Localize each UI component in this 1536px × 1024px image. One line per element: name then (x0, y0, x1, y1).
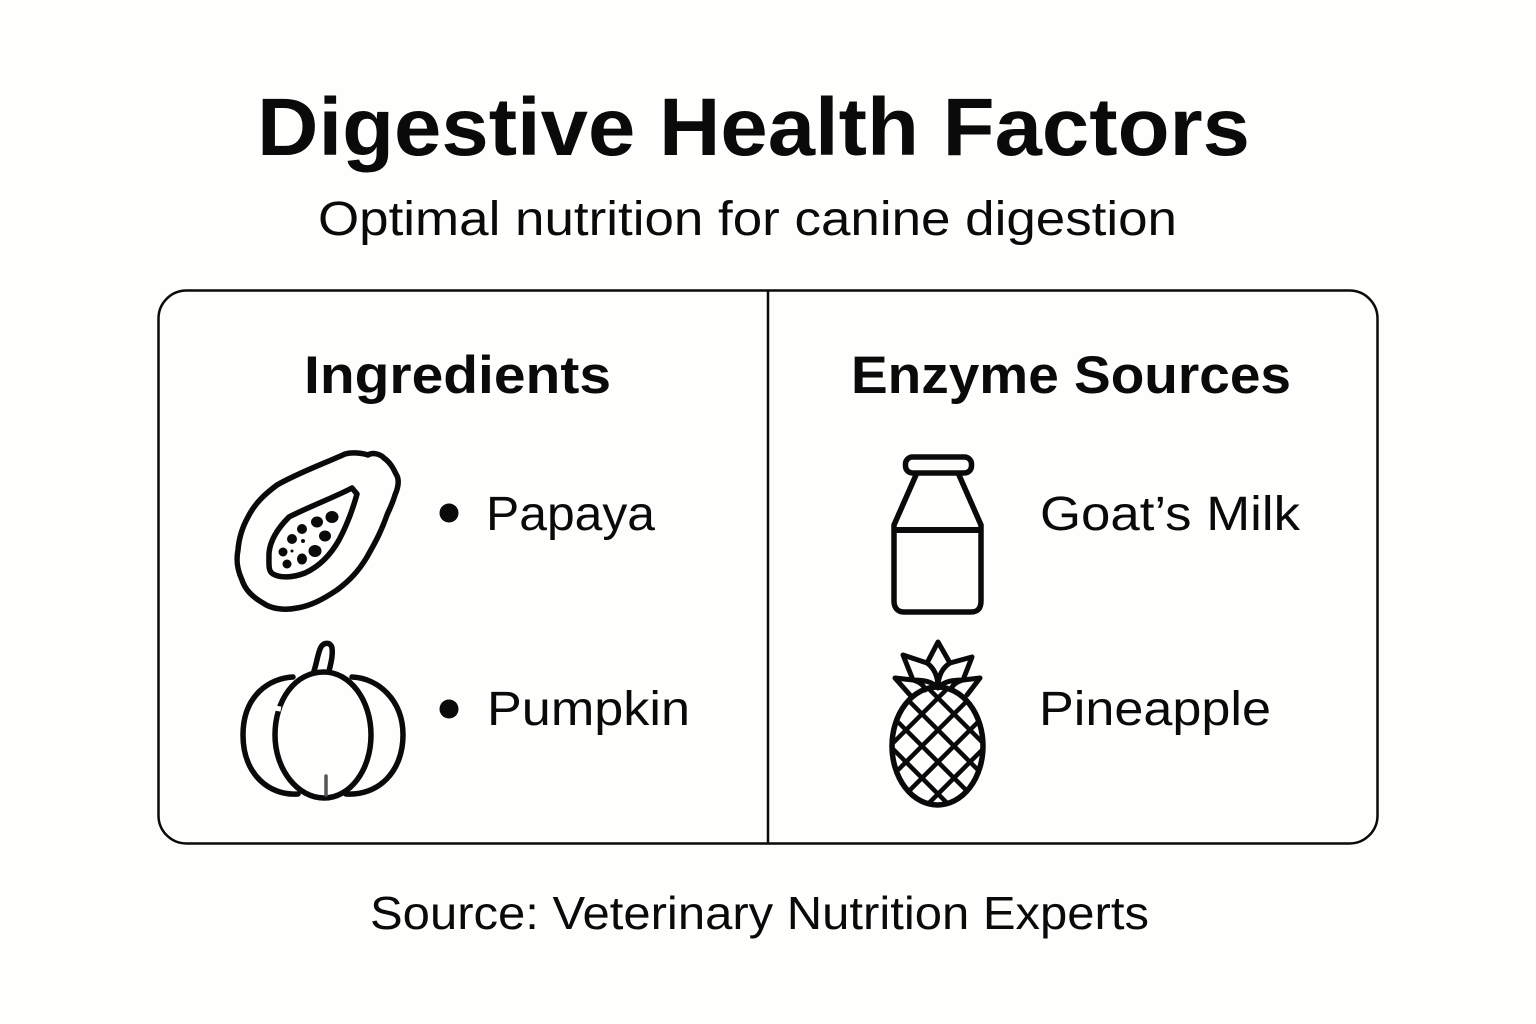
icon: pumpkin (243, 643, 403, 798)
label: papaya: Papaya (486, 488, 655, 541)
heading: enzyme sources: Enzyme Sources (851, 346, 1291, 405)
panel: comparison table (158, 290, 1378, 888)
icon: milk bottle (894, 457, 981, 612)
bullet: pumpkin (440, 700, 458, 718)
icon: pineapple (889, 640, 986, 808)
icon: papaya (237, 453, 398, 609)
source note: Source: Veterinary Nutrition Experts (370, 887, 1149, 939)
title: Digestive Health Factors (257, 82, 1250, 173)
label: pineapple: Pineapple (1039, 683, 1271, 736)
bullet: papaya (440, 504, 458, 522)
subtitle: Optimal nutrition for canine digestion (318, 193, 1177, 246)
heading: ingredients: Ingredients (304, 346, 611, 405)
label: goat's milk: Goat’s Milk (1040, 488, 1301, 541)
label: pumpkin: Pumpkin (487, 683, 690, 736)
